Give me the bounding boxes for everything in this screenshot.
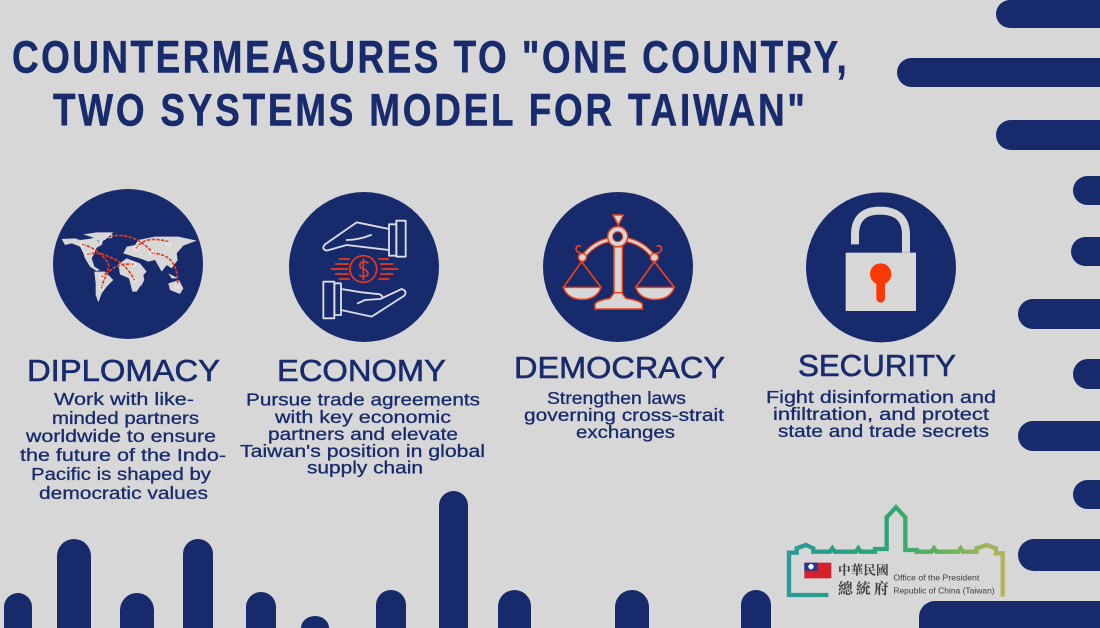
text: economy description: supply chain [307,458,423,478]
panel: diplomacy [20,189,226,503]
text: economy description: partners and elevate [268,424,458,444]
text: security description: state and trade secrets [778,421,989,441]
text: diplomacy description: minded partners [52,408,199,428]
text: economy description [240,390,485,478]
heading: democracy: DEMOCRACY [514,350,725,385]
text: diplomacy description: Pacific is shaped by [31,464,211,484]
panel: security [766,192,996,441]
icon: scales of justice [563,215,674,309]
circle: economy icon background [289,192,439,342]
text: democracy description: exchanges [576,422,675,442]
logo text: 中華民國 [838,563,889,578]
decorative bars: bottom [4,491,771,628]
icon: padlock [806,192,956,342]
logo outline: presidential building [789,507,1003,597]
logo text: 總統府 [838,579,889,597]
decorative bars: right side [897,0,1100,628]
icon: world map with trade routes [62,232,197,302]
text: diplomacy description: worldwide to ensure [25,426,216,446]
text: diplomacy description: Work with like- [54,389,194,409]
icon: flag of Taiwan [804,563,831,578]
title [12,32,847,135]
text: diplomacy description: democratic values [39,483,208,503]
logo text: Office of the President [893,573,980,583]
logo: Office of the President [789,507,1003,597]
text: economy description: with key economic [274,407,451,427]
panel: economy [240,192,485,478]
text: economy description: Pursue trade agreements [246,390,480,410]
logo text [838,563,995,597]
heading: economy: ECONOMY [277,353,446,388]
text: democracy description: governing cross-strait [524,405,724,425]
icon: hands holding coin [323,221,406,318]
circle: diplomacy icon background [53,189,203,339]
panel: democracy [514,192,725,442]
text: security description [766,387,996,441]
circle: democracy icon background [543,192,693,342]
title: TWO SYSTEMS MODEL FOR TAIWAN" [53,85,805,135]
text: diplomacy description: the future of the Indo- [20,445,226,465]
logo text: Republic of China (Taiwan) [893,585,995,595]
text: diplomacy description [20,389,226,503]
title: COUNTERMEASURES TO "ONE COUNTRY, [12,32,847,82]
text: security description: infiltration, and protect [773,404,989,424]
text: democracy description [524,388,724,442]
text: security description: Fight disinformation and [766,387,996,407]
text: democracy description: Strengthen laws [547,388,686,408]
text: economy description: Taiwan's position in global [240,441,485,461]
heading: diplomacy: DIPLOMACY [27,353,220,388]
heading: security: SECURITY [798,348,956,383]
